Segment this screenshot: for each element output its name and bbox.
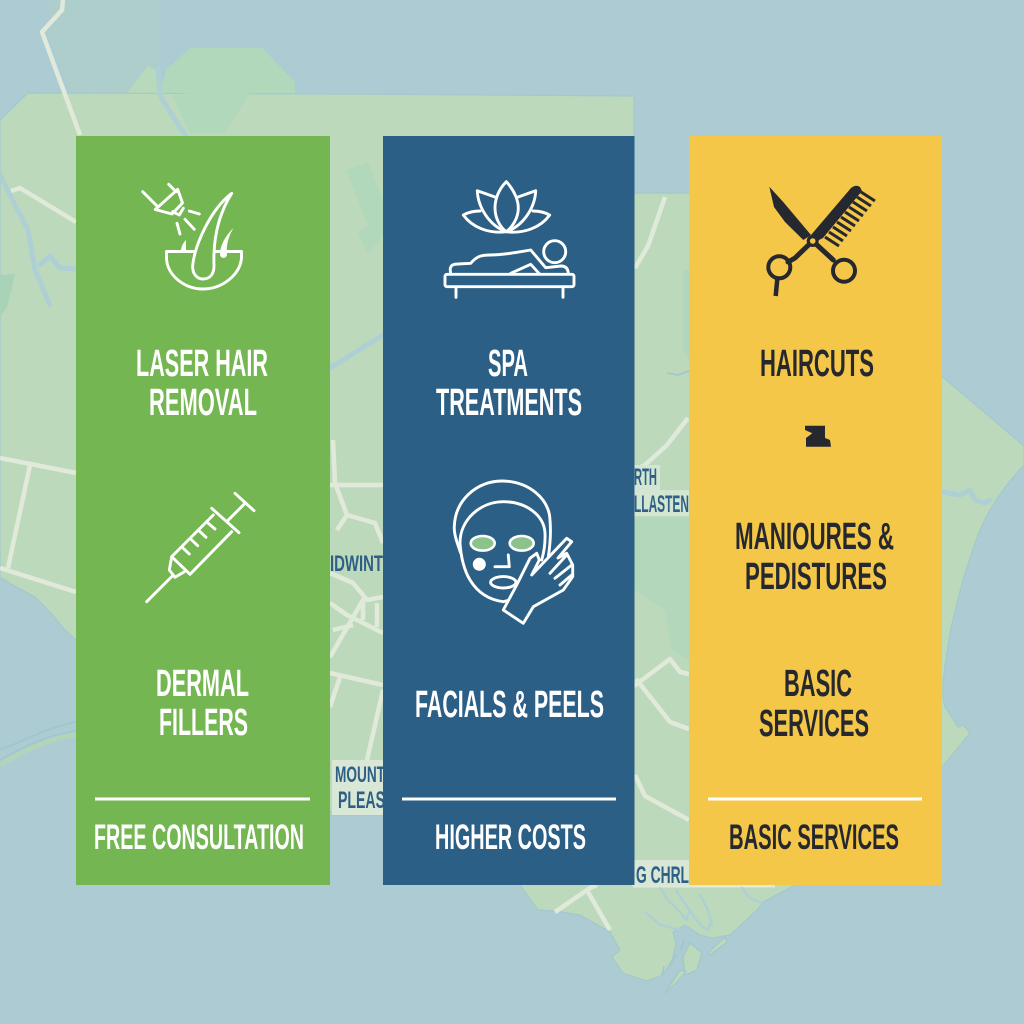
icon: lotus and massage table: [445, 182, 574, 297]
icon: facial mask and hand: [454, 481, 573, 623]
icon: laser hair removal: [143, 184, 242, 289]
background map: LLASTEN: [634, 491, 689, 518]
heading: haircuts: HAIRCUTS: [760, 343, 874, 385]
icon: small dark glyph: [805, 426, 831, 447]
heading: dermal fillers: FILLERS: [159, 702, 248, 744]
footer: basic services: BASIC SERVICES: [729, 818, 899, 857]
heading: laser hair removal: REMOVAL: [149, 382, 257, 424]
background map: PLEAS: [338, 787, 385, 814]
heading: manioures and pedistures: MANIOURES &: [735, 516, 894, 558]
heading: spa treatments: SPA: [488, 343, 528, 385]
heading: dermal fillers: [156, 663, 249, 744]
footer: higher costs: HIGHER COSTS: [435, 818, 586, 857]
heading: facials and peels: FACIALS & PEELS: [415, 684, 604, 726]
background map: MOUNT: [335, 762, 385, 787]
background map: G CHRL: [636, 862, 689, 889]
background map: RTH: [634, 464, 657, 491]
icon: scissors and comb: [768, 186, 875, 296]
panel: medical spa services (green): [76, 136, 330, 885]
heading: spa treatments: [436, 343, 582, 424]
heading: dermal fillers: DERMAL: [156, 663, 249, 705]
heading: laser hair removal: LASER HAIR: [136, 343, 268, 385]
icon: syringe: [147, 493, 254, 602]
heading: laser hair removal: [136, 343, 268, 424]
heading: basic services: BASIC: [784, 663, 852, 705]
panel: salon services (yellow): [689, 136, 942, 885]
panel: spa services (blue): [383, 136, 634, 885]
heading: spa treatments: TREATMENTS: [436, 382, 582, 424]
heading: manioures and pedistures: PEDISTURES: [745, 556, 887, 598]
background map: IDWINT: [330, 551, 383, 576]
heading: basic services: [759, 663, 869, 745]
footer: free consultation: FREE CONSULTATION: [94, 818, 304, 857]
heading: basic services: SERVICES: [759, 703, 869, 745]
heading: manioures and pedistures: [735, 516, 894, 598]
